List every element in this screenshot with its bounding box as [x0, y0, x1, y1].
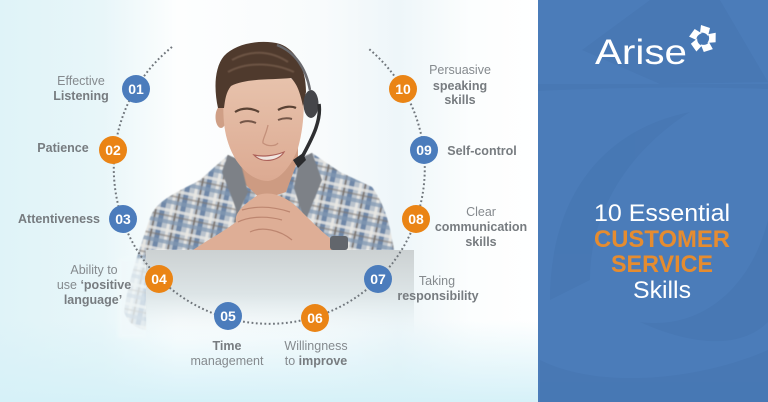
- hair highlights: [228, 53, 294, 72]
- skill 04: language’: [64, 293, 122, 307]
- heading: CUSTOMER: [594, 226, 730, 253]
- skill 03: 03: [115, 211, 131, 227]
- heading: Skills: [633, 277, 691, 304]
- skill 05: Time: [213, 339, 242, 353]
- headset: [277, 45, 310, 90]
- logo: Arise: [595, 33, 687, 72]
- clasped hands: [193, 193, 332, 250]
- skill 07: 07: [370, 271, 386, 287]
- skill 02: 02: [105, 142, 121, 158]
- heading: [595, 204, 730, 298]
- mouth: [254, 152, 284, 160]
- skill 08: communication: [435, 220, 527, 234]
- hair: [216, 42, 306, 108]
- skill 01: [53, 74, 150, 103]
- eyes and brows: [235, 107, 296, 112]
- logo: [595, 25, 716, 64]
- skill 04: 04: [151, 271, 167, 287]
- skill 10: 10: [395, 81, 411, 97]
- photo: call centre agent with headset: [118, 42, 394, 338]
- skill 10: [389, 63, 491, 107]
- skill 05: [191, 302, 264, 368]
- dotted arc linking the skills: [114, 47, 425, 324]
- skill 10: skills: [444, 93, 476, 107]
- skill 09: [410, 136, 517, 164]
- skill 02: Patience: [37, 141, 89, 155]
- skill 01: 01: [128, 81, 144, 97]
- shirt: [124, 153, 394, 330]
- watch: [330, 236, 348, 250]
- skill 07: Taking: [419, 274, 455, 288]
- skill 04: use ‘positive: [57, 278, 131, 292]
- heading: SERVICE: [611, 251, 713, 278]
- skill 01: Effective: [57, 74, 105, 88]
- nose: [263, 125, 278, 146]
- face: [223, 78, 304, 181]
- laptop: [146, 250, 414, 340]
- skill 09: Self-control: [447, 144, 517, 158]
- skill 05: 05: [220, 308, 236, 324]
- skill 08: [402, 205, 527, 249]
- skill 08: 08: [408, 211, 424, 227]
- skill 07: [364, 265, 479, 303]
- skill 06: to improve: [285, 354, 347, 368]
- skill 08: skills: [465, 235, 497, 249]
- skill 10: Persuasive: [429, 63, 491, 77]
- skill 05: management: [191, 354, 264, 368]
- skill 06: 06: [307, 310, 323, 326]
- neck: [241, 148, 298, 196]
- panel: title and logo: [538, 0, 768, 402]
- skill 09: 09: [416, 142, 432, 158]
- skill 08: Clear: [466, 205, 496, 219]
- skill 03: Attentiveness: [18, 212, 100, 226]
- skill 10: speaking: [433, 79, 487, 93]
- skill 02: [37, 136, 127, 164]
- skill 06: Willingness: [284, 339, 348, 353]
- skill 06: [284, 304, 348, 368]
- heading: 10 Essential: [594, 200, 730, 227]
- ear: [216, 108, 224, 128]
- background: soft blue and white photo backdrop: [0, 0, 538, 402]
- skill 07: responsibility: [397, 289, 479, 303]
- panel swirl shading: [538, 0, 768, 402]
- skill 04: Ability to: [70, 263, 118, 277]
- shirt fade lower left: [124, 256, 146, 330]
- icon: pinwheel: [689, 25, 716, 52]
- skill 01: Listening: [53, 89, 109, 103]
- skill 03: [18, 205, 137, 233]
- skill 04: [57, 263, 173, 307]
- collar: [222, 153, 322, 222]
